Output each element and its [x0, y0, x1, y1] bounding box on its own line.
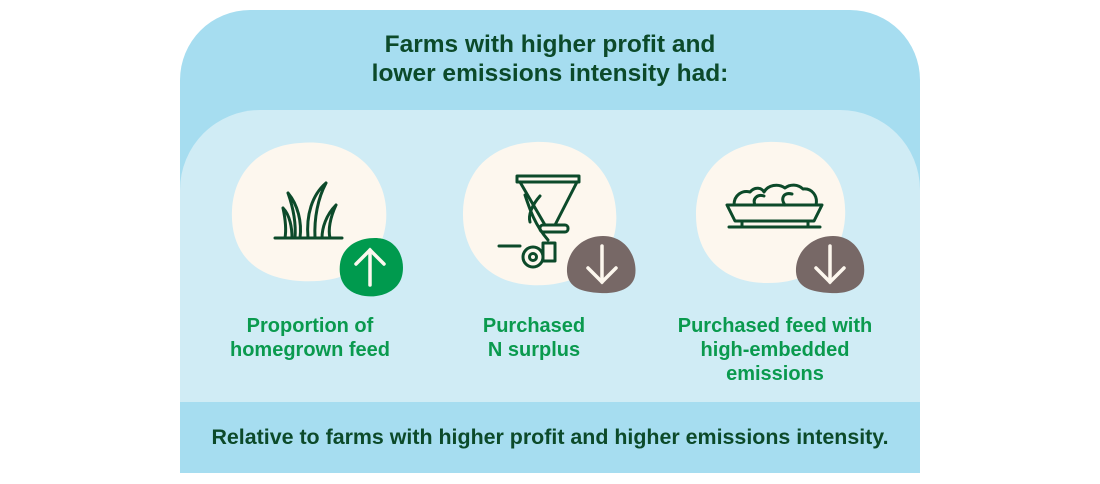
- footer text: Relative to farms with higher profit and higher emissions intensity.: [211, 425, 889, 449]
- icon group: homegrown feed: [232, 143, 403, 296]
- label: homegrown feed: Proportion of: [247, 315, 373, 337]
- label: purchased feed: Purchased feed with: [678, 315, 872, 337]
- label: purchased feed: high-embedded: [701, 339, 849, 361]
- label: purchased feed: [678, 315, 872, 385]
- label: N surplus: N surplus: [488, 339, 580, 361]
- title: Farms with higher profit and: [385, 31, 715, 58]
- title: lower emissions intensity had:: [372, 60, 728, 87]
- label: homegrown feed: [230, 315, 390, 361]
- icon group: purchased feed bowl: [696, 142, 864, 293]
- outer panel: [180, 10, 920, 473]
- icon group: N surplus spreader: [463, 142, 636, 293]
- label: N surplus: [483, 315, 585, 361]
- label: homegrown feed: homegrown feed: [230, 339, 390, 361]
- label: purchased feed: emissions: [726, 363, 824, 385]
- title: [372, 31, 728, 87]
- inner panel: [180, 110, 920, 402]
- label: N surplus: Purchased: [483, 315, 585, 337]
